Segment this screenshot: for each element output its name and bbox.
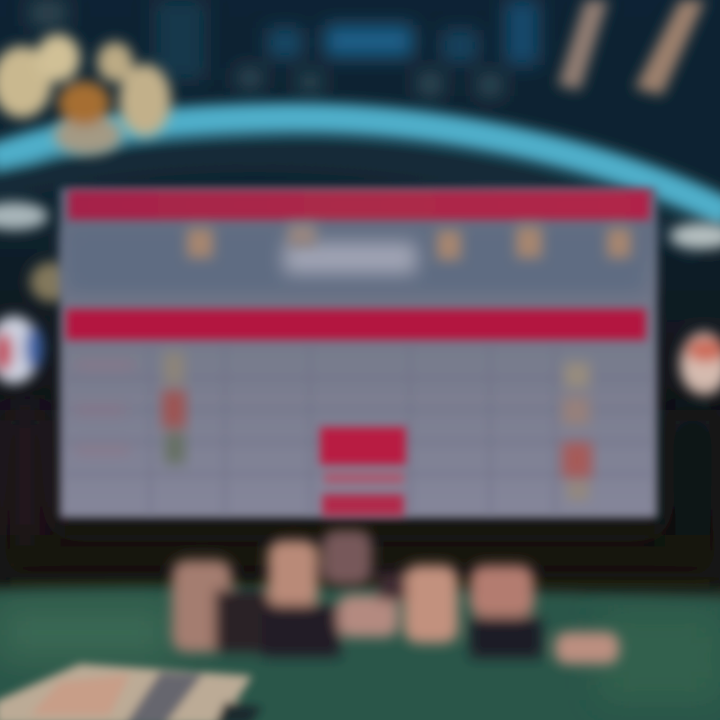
field lighter bands: [0, 605, 720, 700]
blue arc: [0, 118, 720, 245]
upper row section: [66, 228, 646, 294]
players group: [172, 530, 619, 664]
panel: scoreboard: [60, 188, 657, 518]
side glow left: [0, 262, 74, 384]
second red header: [66, 309, 646, 340]
chandelier light: [0, 34, 171, 155]
grass field: [0, 587, 720, 720]
bottom-left field mat: [0, 664, 262, 720]
scoreboard body: [60, 188, 657, 518]
dark seats band: [0, 410, 720, 577]
left and right white glow: [0, 202, 720, 249]
upper right hanging shapes: [558, 0, 705, 95]
right figure column: [562, 362, 592, 500]
center red block: [320, 427, 406, 516]
stadium upper lights: [30, 0, 539, 96]
left figure column: [162, 352, 186, 464]
top red header: [68, 190, 650, 220]
side glow right: [680, 332, 720, 396]
lower grid lines: [66, 345, 650, 515]
left faint red row labels: [75, 360, 135, 455]
column orange icons: [187, 224, 631, 260]
